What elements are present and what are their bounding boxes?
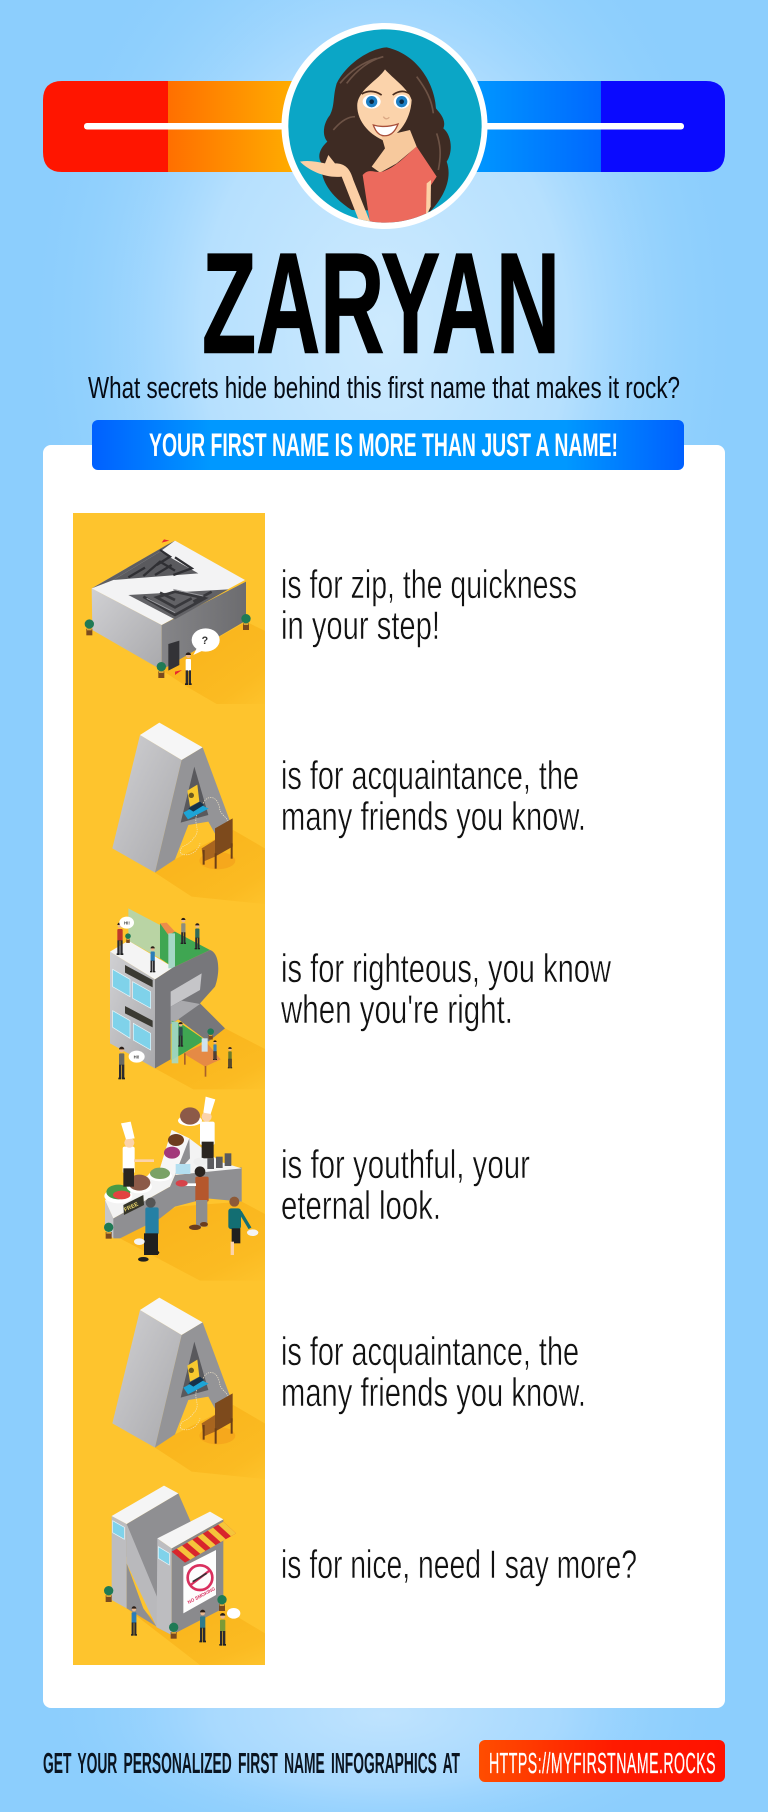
text: Z line: is for zip, the quickness [281, 563, 577, 607]
title: ZARYAN [202, 224, 560, 384]
text: A line repeat: many friends you know. [281, 1371, 586, 1415]
banner [92, 420, 684, 470]
text: Y line [281, 1143, 530, 1228]
illustration: letter Z maze: ? [202, 635, 208, 647]
illustration: letter Z maze [85, 539, 273, 704]
text: R line: when you're right. [280, 988, 513, 1032]
panel: white content card [43, 445, 725, 1708]
illustration: letter R office building: Hi! [134, 1054, 140, 1059]
illustration: letter Y buffet table [104, 1097, 273, 1281]
illustration: letter N shop: NO SMOKING [187, 1586, 216, 1605]
text: A line repeat: is for acquaintance, the [281, 1330, 579, 1374]
text: R line: is for righteous, you know [281, 947, 611, 991]
illustration: letter A with laptop and chair [112, 723, 273, 905]
text: Y line: eternal look. [281, 1184, 441, 1228]
text: A line: is for acquaintance, the [281, 754, 579, 798]
text: R line [280, 947, 611, 1032]
illustration: letter A with laptop and chair (repeat) [112, 1298, 273, 1480]
avatar: smiling woman in a circle [282, 23, 488, 229]
illustration: letter R office building: Hi! [124, 920, 130, 925]
text: A line [281, 754, 586, 839]
text: Z line [281, 563, 577, 648]
text: A line: many friends you know. [281, 795, 586, 839]
footer url button [479, 1740, 725, 1782]
text: A line repeat [281, 1330, 586, 1415]
text: Y line: is for youthful, your [281, 1143, 530, 1187]
panel: yellow illustration strip [73, 513, 265, 1665]
illustration: letter Y buffet table: FREE [123, 1202, 140, 1213]
illustration: letter N shop [104, 1486, 273, 1665]
text: Z line: in your step! [281, 604, 440, 648]
illustration: letter R office building [110, 908, 273, 1089]
header colour bar [43, 81, 725, 172]
